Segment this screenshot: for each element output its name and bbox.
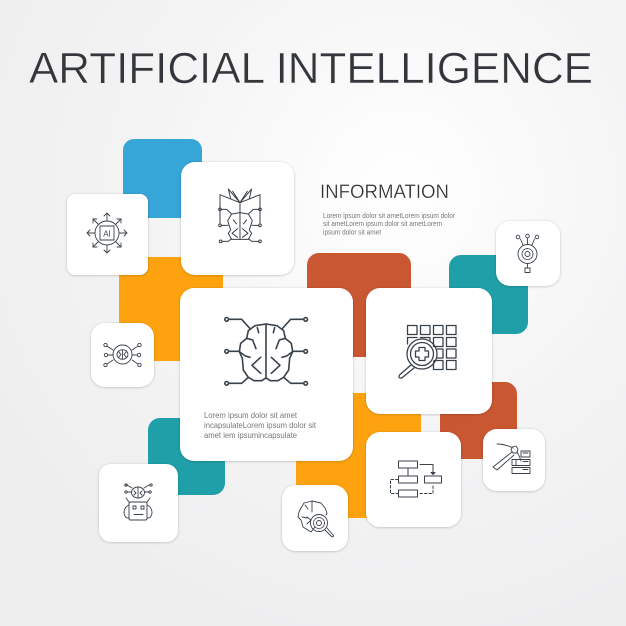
icon: grid with magnifier <box>399 326 456 378</box>
card: AI chip <box>67 194 148 275</box>
text: main description: incapsulateLorem ipsum dolor sit <box>204 421 317 430</box>
text: main description: Lorem ipsum dolor sit amet <box>204 411 298 420</box>
card: brain network <box>91 323 154 387</box>
card: grid search <box>366 288 492 414</box>
heading: information: INFORMATION <box>320 182 449 203</box>
card: gear network <box>496 221 560 286</box>
icon: brain in circle with nodes <box>104 343 141 367</box>
text: information description: ipsum dolor sit amet <box>323 230 381 236</box>
card: robot <box>99 464 178 542</box>
card: pickaxe mining <box>483 429 545 491</box>
panel: blue block <box>123 139 202 218</box>
icon: circuit brain <box>225 317 307 385</box>
label: AI: AI <box>103 230 111 238</box>
icon: brain with open book <box>219 189 261 243</box>
title: ARTIFICIAL INTELLIGENCE <box>29 44 593 93</box>
panel: orange block bottom <box>296 393 421 518</box>
panel: orange block left <box>119 257 223 361</box>
panel: teal block right <box>449 255 528 334</box>
panel: red block lower <box>440 382 517 459</box>
card: book brain <box>181 162 294 275</box>
card: main brain <box>180 288 353 461</box>
panel: red block top <box>307 253 411 357</box>
text: main description: amet iem ipsumincapsulate <box>204 431 298 440</box>
icon: pickaxe and servers <box>493 444 530 474</box>
icon: brain with magnifier <box>298 501 333 537</box>
icon: flow chart <box>390 461 442 497</box>
text: information description: sit ametLorem ipsum dolor sit ametLorem <box>323 221 442 228</box>
card: brain search <box>282 485 348 551</box>
icon: robot with brain <box>124 484 152 520</box>
text: information description: Lorem ipsum dolor sit ametLorem ipsum dolor <box>323 213 456 220</box>
icon: gear with nodes <box>516 234 539 272</box>
card: flow chart <box>366 432 461 527</box>
panel: teal block left <box>148 418 225 495</box>
